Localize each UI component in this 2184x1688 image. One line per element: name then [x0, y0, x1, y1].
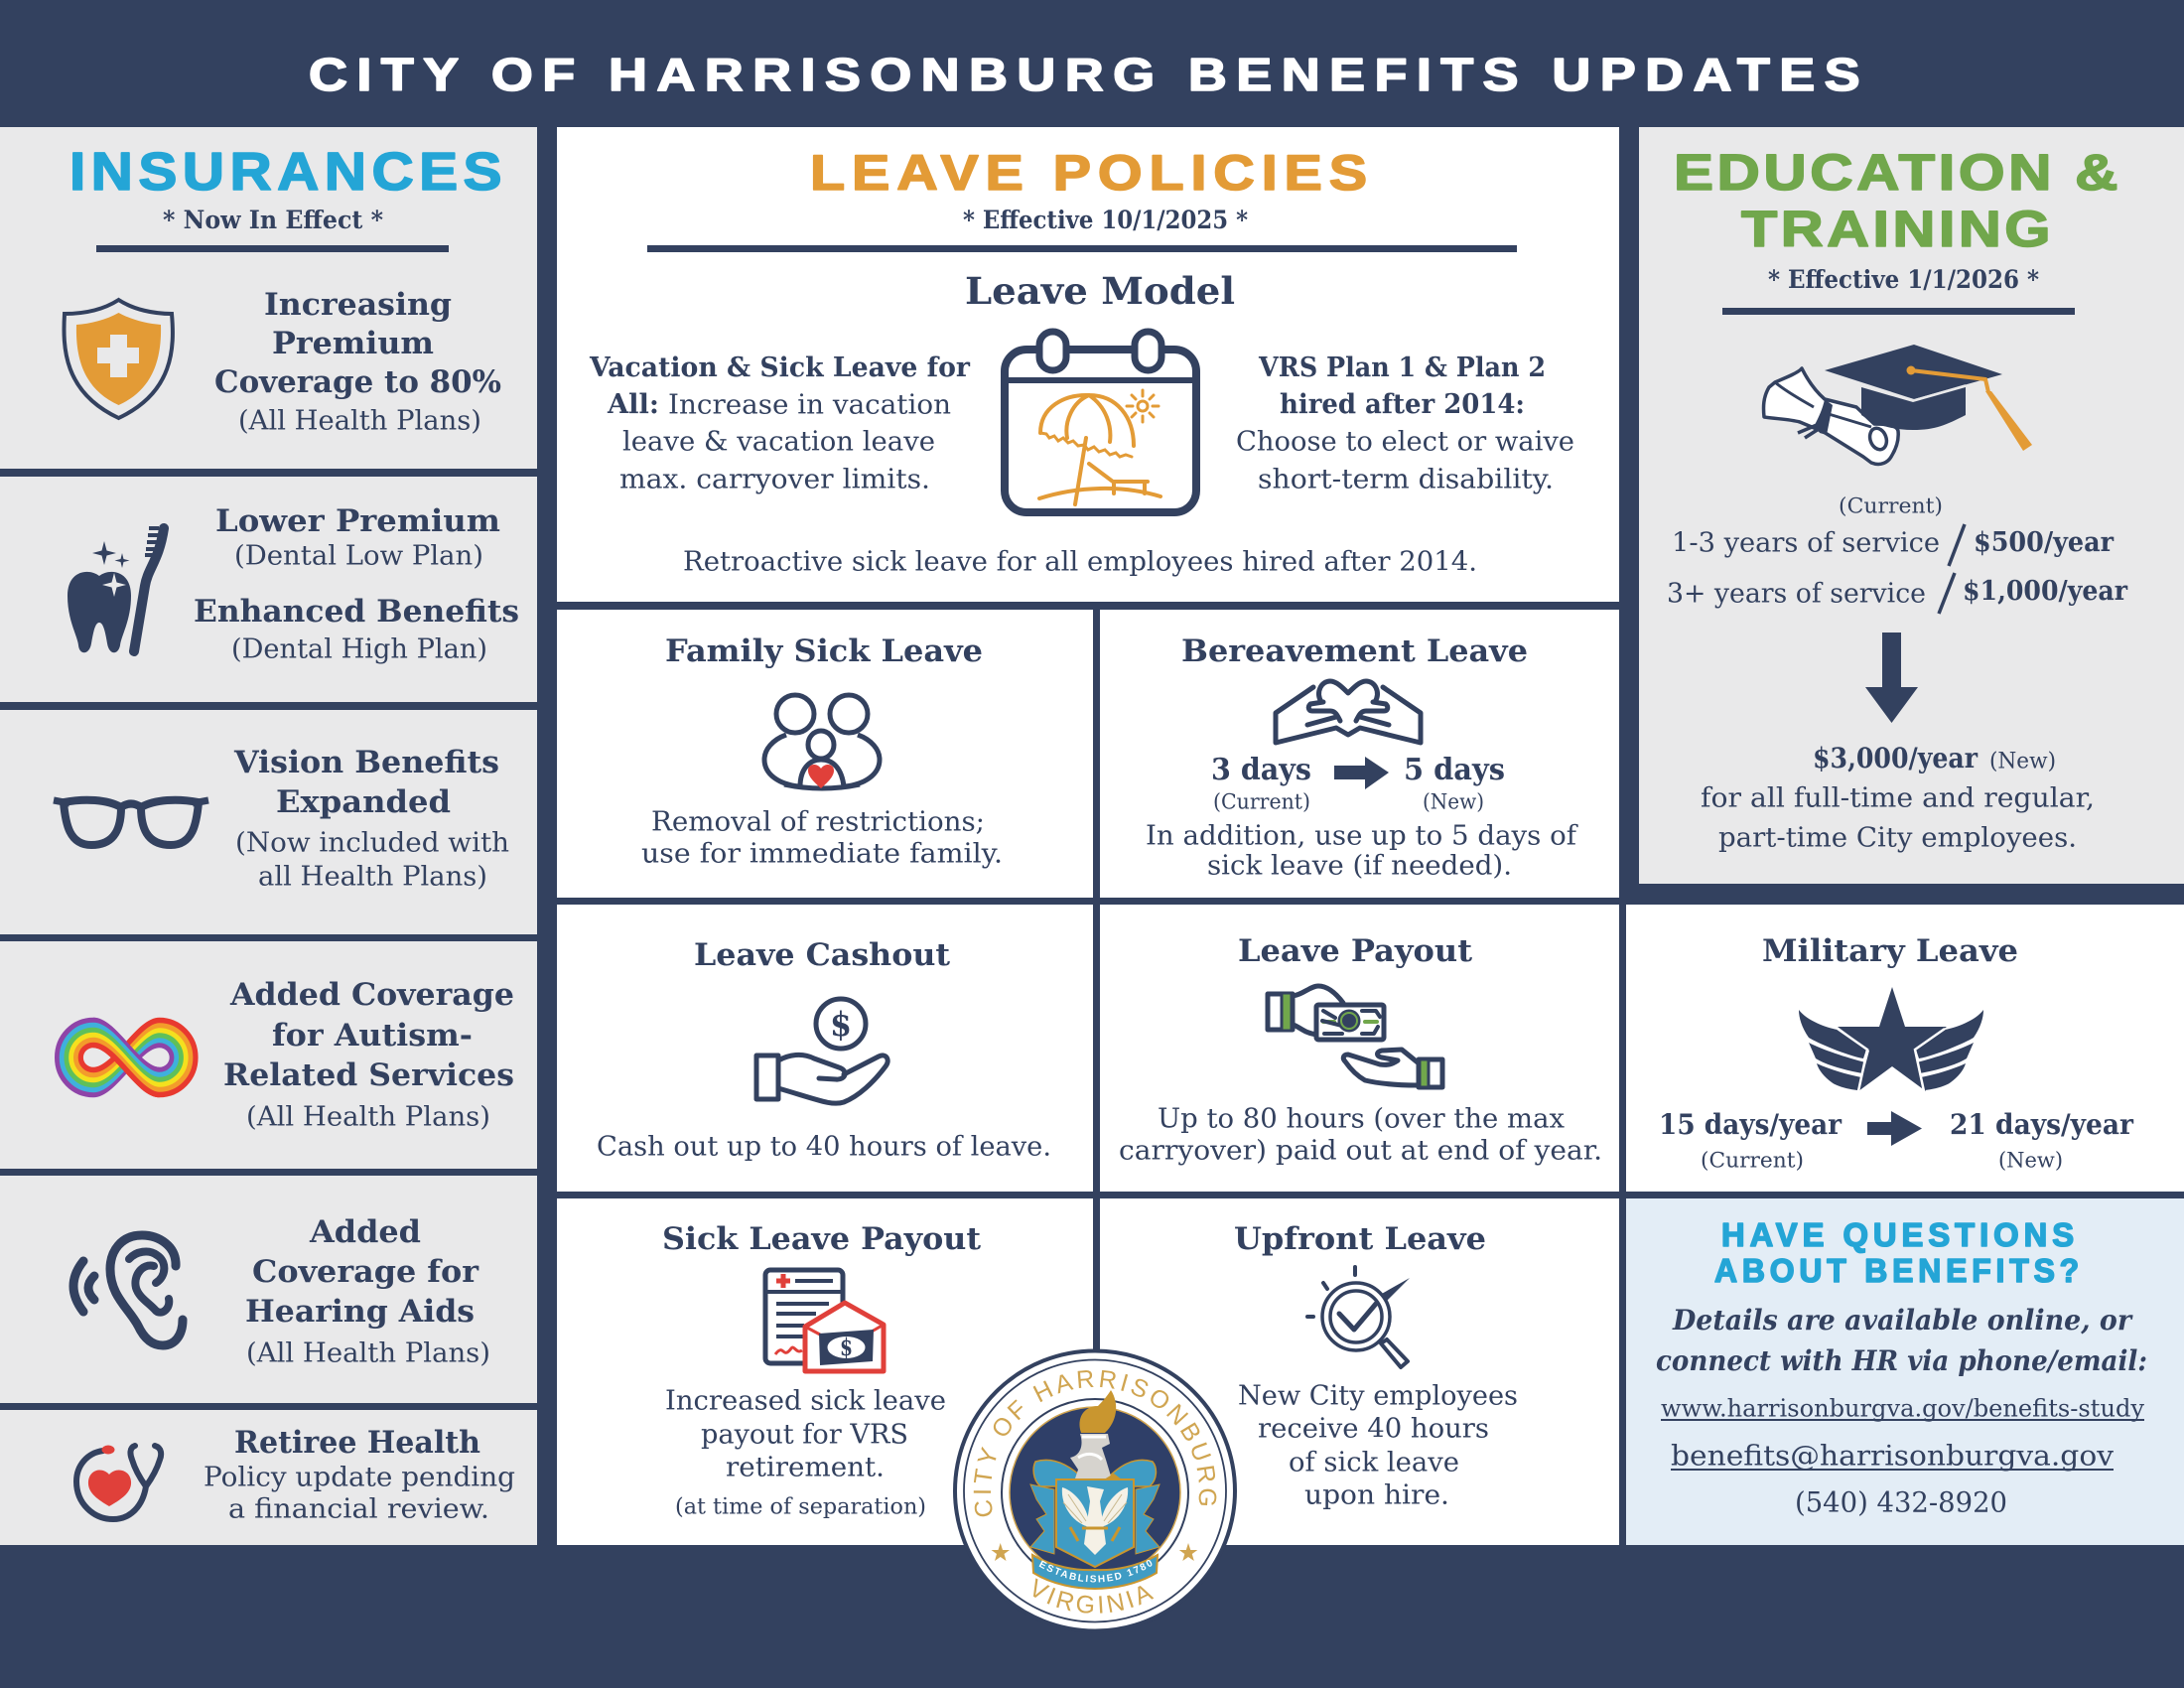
text: current amounts [1667, 494, 2128, 614]
seal text: virginia: VIRGINIA [1033, 1578, 1154, 1614]
text: 3 days current: 3 days [1211, 753, 1311, 787]
heading: bereavement leave: Bereavement Leave [1181, 633, 1528, 669]
text: up to 80 hours [1119, 1104, 1602, 1166]
text: vision: Vision Benefits [233, 745, 499, 780]
panel: insurances [0, 127, 537, 1545]
text: retiree health [204, 1425, 515, 1525]
text: increased sick leave payout [665, 1386, 946, 1519]
text: dental: Lower Premium [215, 503, 500, 539]
heading: family sick leave: Family Sick Leave [665, 633, 983, 669]
text: removal of restrictions [641, 806, 1003, 870]
text: removal of restrictions: Removal of restrictions; [651, 806, 985, 838]
text: in addition [1146, 820, 1578, 882]
text: cash out: Cash out up to 40 hours of leave. [597, 1132, 1051, 1162]
text: retiree health: a financial review. [228, 1493, 489, 1525]
seal stars [991, 1543, 1197, 1561]
icon: graduation cap and diploma [1764, 345, 2032, 464]
heading: leave payout: Leave Payout [1238, 933, 1473, 969]
heading: have questions: HAVE QUESTIONS [1721, 1216, 2079, 1253]
text: up to 80 hours: Up to 80 hours (over the max [1158, 1104, 1565, 1134]
text: details [1656, 1304, 2147, 1377]
text: new amount: part-time City employees. [1718, 822, 2077, 854]
text: current amounts: $1,000/year [1963, 576, 2128, 607]
text: increasing premium coverage: Premium [272, 326, 434, 361]
text: 21 days new: 21 days/year [1950, 1108, 2134, 1141]
icon: shield [64, 300, 173, 418]
icon: document and envelope: $ [840, 1333, 853, 1361]
text: new city employees: New City employees [1238, 1380, 1518, 1412]
text: 5 days new: 5 days [1404, 753, 1505, 787]
heading: have questions [1714, 1216, 2084, 1289]
text: 15 days current: 15 days/year [1659, 1108, 1843, 1141]
text: up to 80 hours: carryover) paid out at end of year. [1119, 1136, 1602, 1166]
text: current amounts: (Current) [1839, 494, 1943, 518]
text: vacation and sick leave: Increase in vacation [668, 389, 951, 421]
icon: magnifier with check [1307, 1267, 1410, 1367]
heading: leave model: Leave Model [965, 269, 1235, 313]
seal crest: ESTABLISHED 1780 [1038, 1560, 1152, 1583]
icon: hands exchanging money [1268, 986, 1442, 1087]
dividers [1093, 610, 1100, 1364]
text: 3 days current [1211, 753, 1311, 814]
text: vacation and sick leave [589, 352, 971, 494]
text: vrs plans: hired after 2014: [1280, 389, 1525, 420]
text: 3 days current: (Current) [1213, 790, 1310, 814]
subheading: now in effect: * Now In Effect * [163, 206, 383, 234]
text: new amount: (New) [1989, 749, 2056, 774]
text: increased sick leave payout: Increased sick leave [665, 1386, 946, 1416]
heading: education and training [1674, 144, 2121, 257]
text: vrs plans: VRS Plan 1 & Plan 2 [1258, 352, 1546, 383]
heading: insurances: INSURANCES [69, 142, 507, 202]
text: hearing aids [245, 1214, 490, 1368]
icon: document and envelope [765, 1270, 884, 1371]
text: vacation and sick leave: All: [607, 389, 659, 420]
icon: tooth and toothbrush [68, 528, 164, 652]
text: current amounts: 3+ years of service [1667, 578, 1926, 610]
text: vision: (Now included with [235, 828, 509, 858]
heading: education and training: TRAINING [1741, 201, 2054, 257]
text: hearing aids: (All Health Plans) [246, 1338, 490, 1368]
text: autism coverage: for Autism- [272, 1018, 473, 1054]
icon: glasses [54, 800, 208, 845]
panel: sick leave payout [557, 1198, 1093, 1545]
text: hearing aids: Coverage for [252, 1254, 479, 1290]
link: website: www.harrisonburgva.gov/benefits-study [1661, 1394, 2144, 1422]
seal text: city of harrisonburg: CITY OF HARRISONBURG [973, 1370, 1217, 1517]
panel: questions about benefits [1626, 1198, 2184, 1545]
icon: hand with coin: $ [830, 1005, 852, 1045]
text: dental: Enhanced Benefits [194, 594, 519, 630]
text: autism coverage: Added Coverage [229, 977, 514, 1013]
text: autism coverage [223, 977, 514, 1132]
city seal [953, 1348, 1237, 1628]
heading: education and training: EDUCATION & [1674, 144, 2121, 201]
text: vision [233, 745, 509, 892]
arrow [1334, 757, 1389, 789]
text: vrs plans [1236, 352, 1574, 494]
panel: military leave [1626, 905, 2184, 1192]
heading: sick leave payout: Sick Leave Payout [662, 1221, 982, 1257]
panel: upfront leave [1100, 1198, 1619, 1545]
text: 15 days current [1659, 1108, 1843, 1172]
heading: military leave: Military Leave [1762, 933, 2018, 969]
text: in addition: sick leave (if needed). [1207, 850, 1512, 882]
title: CITY OF HARRISONBURG BENEFITS UPDATES [309, 49, 1869, 100]
text: increased sick leave payout: payout for VRS [701, 1420, 908, 1450]
text: increasing premium coverage: Coverage to 80% [214, 364, 501, 400]
text: vrs plans: Choose to elect or waive [1236, 427, 1574, 457]
text: 5 days new: (New) [1423, 790, 1484, 814]
text: retiree health: Policy update pending [204, 1462, 515, 1493]
subheading: effective date: * Effective 10/1/2025 * [963, 206, 1248, 234]
text: new amount: $3,000/year [1813, 742, 1979, 774]
text: increasing premium coverage: (All Health Plans) [238, 405, 481, 437]
text: 15 days current: (Current) [1701, 1148, 1804, 1172]
text: vrs plans: short-term disability. [1258, 465, 1554, 494]
text: 5 days new [1404, 753, 1505, 814]
heading: have questions: ABOUT BENEFITS? [1714, 1252, 2084, 1289]
icon: winged star [1799, 987, 1983, 1091]
icon: stethoscope heart [76, 1446, 161, 1519]
icon: hand with coin [756, 999, 887, 1103]
text: new city employees: of sick leave [1289, 1448, 1459, 1477]
text: new city employees [1238, 1380, 1518, 1511]
arrow [1867, 1111, 1922, 1146]
panel: leave model [557, 127, 1619, 602]
text: increasing premium coverage [214, 287, 501, 437]
text: dental: (Dental Low Plan) [234, 540, 483, 572]
text: increased sick leave payout: (at time of separation) [675, 1495, 926, 1519]
text: details: Details are available online, or [1672, 1304, 2133, 1336]
text: 21 days new [1950, 1108, 2134, 1172]
icon: rainbow infinity [58, 1021, 196, 1094]
text: vacation and sick leave: Vacation & Sick Leave for [589, 352, 971, 383]
panel: leave cashout [557, 905, 1093, 1192]
text: vision: all Health Plans) [258, 862, 487, 892]
text: phone: (540) 432-8920 [1795, 1485, 2007, 1519]
text: vacation and sick leave: max. carryover limits. [619, 465, 930, 494]
heading: leave policies: LEAVE POLICIES [810, 145, 1374, 201]
icon: ear [73, 1235, 183, 1345]
panel: leave payout [1100, 905, 1619, 1192]
text: new city employees: receive 40 hours [1258, 1414, 1489, 1444]
arrow: down [1865, 633, 1918, 723]
heading: upfront leave: Upfront Leave [1234, 1221, 1486, 1257]
text: vacation and sick leave: leave & vacation leave [622, 427, 935, 457]
text: increasing premium coverage: Increasing [264, 287, 452, 323]
icon: calendar with beach umbrella [1005, 332, 1196, 512]
subheading: effective date: * Effective 1/1/2026 * [1768, 265, 2039, 294]
text: hearing aids: Added [309, 1214, 421, 1250]
text: current amounts: $500/year [1974, 527, 2115, 558]
text: vision: Expanded [276, 784, 451, 820]
text: removal of restrictions: use for immediate family. [641, 838, 1003, 870]
text: autism coverage: (All Health Plans) [246, 1102, 490, 1132]
text: new city employees: upon hire. [1304, 1479, 1449, 1511]
text: dental: (Dental High Plan) [231, 633, 487, 665]
panel: education and training [1639, 127, 2184, 884]
text: details: connect with HR via phone/email: [1656, 1344, 2147, 1377]
text: new amount [1701, 742, 2095, 854]
text: retroactive sick leave: Retroactive sick leave for all employees hired after 2014. [683, 546, 1477, 578]
text: hearing aids: Hearing Aids [245, 1294, 475, 1330]
text: new amount: for all full-time and regular, [1701, 782, 2095, 814]
text: retiree health: Retiree Health [234, 1425, 480, 1461]
text: autism coverage: Related Services [223, 1057, 514, 1093]
icon: family [764, 695, 880, 788]
heading: leave cashout: Leave Cashout [694, 937, 951, 973]
panel: family sick leave [557, 610, 1093, 898]
seal crest [1029, 1390, 1160, 1590]
text: in addition: In addition, use up to 5 days of [1146, 820, 1578, 852]
text: 21 days new: (New) [1998, 1148, 2063, 1172]
panel: bereavement leave [1100, 610, 1619, 898]
text: dental [194, 503, 519, 665]
icon: hands holding heart [1276, 681, 1421, 743]
text: current amounts: 1-3 years of service [1672, 528, 1940, 558]
text: increased sick leave payout: retirement. [726, 1452, 885, 1483]
link: email: benefits@harrisonburgva.gov [1671, 1440, 2114, 1472]
